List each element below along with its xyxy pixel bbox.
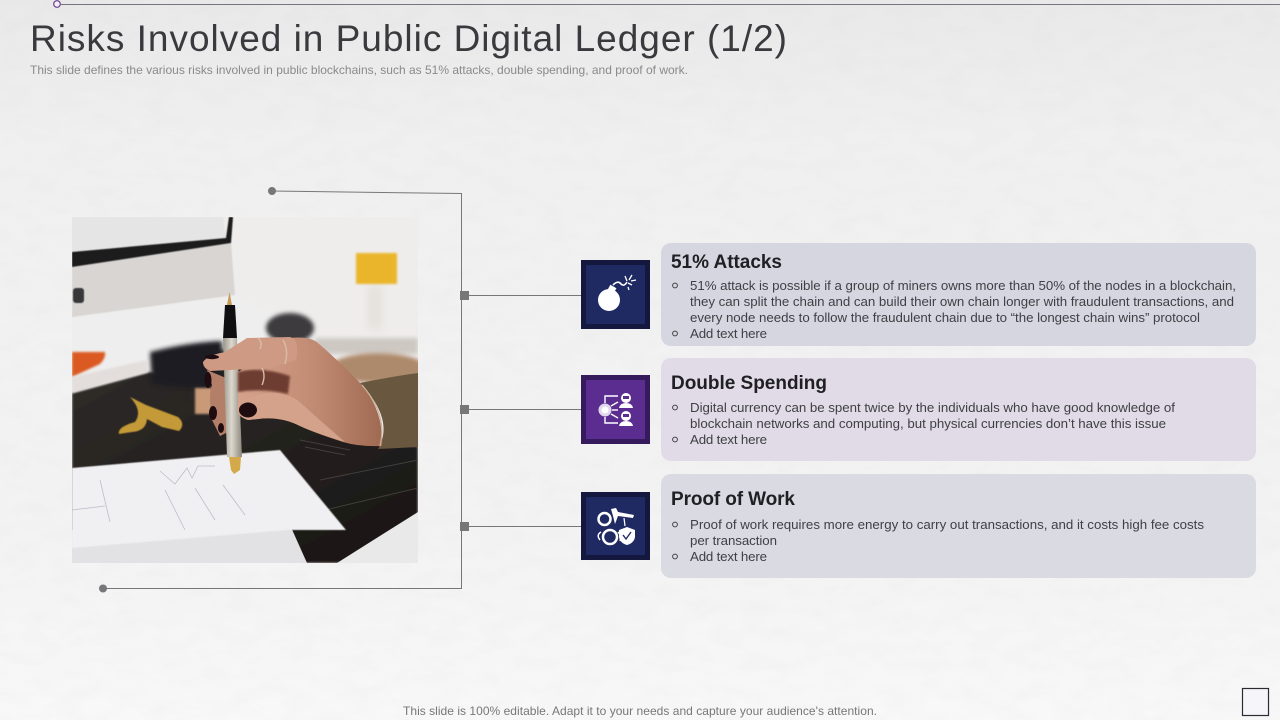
bullet text: 51% attacks bbox=[673, 278, 1236, 341]
panel: proof of work bbox=[661, 474, 1256, 578]
wood piece bbox=[194, 386, 212, 416]
connector nodes bbox=[460, 291, 469, 531]
bullet text: double spending: Add text here bbox=[690, 432, 767, 447]
bullet text: proof of work: Add text here bbox=[690, 549, 767, 564]
hand bbox=[238, 338, 382, 446]
panel: 51% attacks bbox=[661, 243, 1256, 346]
heading: proof of work: Proof of Work bbox=[671, 489, 795, 510]
thumb nail bbox=[239, 402, 257, 418]
panel: double spending bbox=[661, 358, 1256, 461]
bullet text: proof of work: per transaction bbox=[690, 533, 777, 548]
bullet text: double spending: blockchain networks and computing, but physical currencies don’t have this issue bbox=[690, 416, 1166, 431]
sweater sleeve bbox=[360, 373, 418, 449]
heading: double spending: Double Spending bbox=[671, 373, 827, 394]
bullet text: 51% attacks: every node needs to follow the fraudulent chain due to “the longest chain wins” protocol bbox=[690, 310, 1200, 325]
speaker bbox=[150, 341, 222, 387]
desk surface lines bbox=[300, 440, 418, 510]
rings bbox=[258, 338, 287, 385]
bullet text: double spending: Digital currency can be spent twice by the individuals who have good knowledge of bbox=[690, 400, 1175, 415]
footer note: This slide is 100% editable. Adapt it to your needs and capture your audience's attention. bbox=[403, 704, 877, 718]
photo: hand holding pen over paper bbox=[72, 217, 426, 563]
yellow block and glass bbox=[368, 285, 382, 330]
bullet text: double spending bbox=[673, 400, 1175, 447]
icon: double spending bbox=[581, 375, 650, 444]
bullet text: 51% attacks: they can split the chain and can build their own chain longer with fraudulent transactions, and bbox=[690, 294, 1234, 309]
woven mat bbox=[330, 353, 426, 383]
slide number box bbox=[1242, 688, 1268, 716]
index finger bbox=[203, 337, 297, 371]
paper bbox=[72, 529, 307, 563]
bracket connector lines bbox=[103, 191, 581, 588]
bracelet bbox=[362, 385, 382, 446]
heading: 51% attacks: 51% Attacks bbox=[671, 252, 782, 273]
bullet text: proof of work: Proof of work requires more energy to carry out transactions, and it costs high fee costs bbox=[690, 517, 1204, 532]
backdrop band and white desk front bbox=[72, 295, 418, 375]
bullet text: 51% attacks: Add text here bbox=[690, 326, 767, 341]
lower fingers behind pen bbox=[207, 370, 228, 436]
gold ornament bbox=[119, 397, 182, 434]
monitor bbox=[72, 217, 226, 252]
subtitle: This slide defines the various risks involved in public blockchains, such as 51% attacks, double spending, and proof of work. bbox=[30, 63, 688, 77]
top rule with circle marker bbox=[54, 1, 1280, 7]
icon: bomb bbox=[581, 260, 650, 329]
bullet text: proof of work bbox=[673, 517, 1204, 564]
bullet text: 51% attacks: 51% attack is possible if a group of miners owns more than 50% of the nodes in a blockchain, bbox=[690, 278, 1236, 293]
red object bbox=[72, 352, 105, 377]
desk bbox=[72, 372, 418, 563]
white tray bbox=[72, 360, 148, 393]
black object behind hand bbox=[266, 313, 314, 343]
bracket end dots bbox=[99, 187, 276, 592]
icon: proof of work bbox=[581, 492, 650, 560]
pen bbox=[223, 292, 242, 474]
title: Risks Involved in Public Digital Ledger (1/2) bbox=[30, 18, 787, 59]
